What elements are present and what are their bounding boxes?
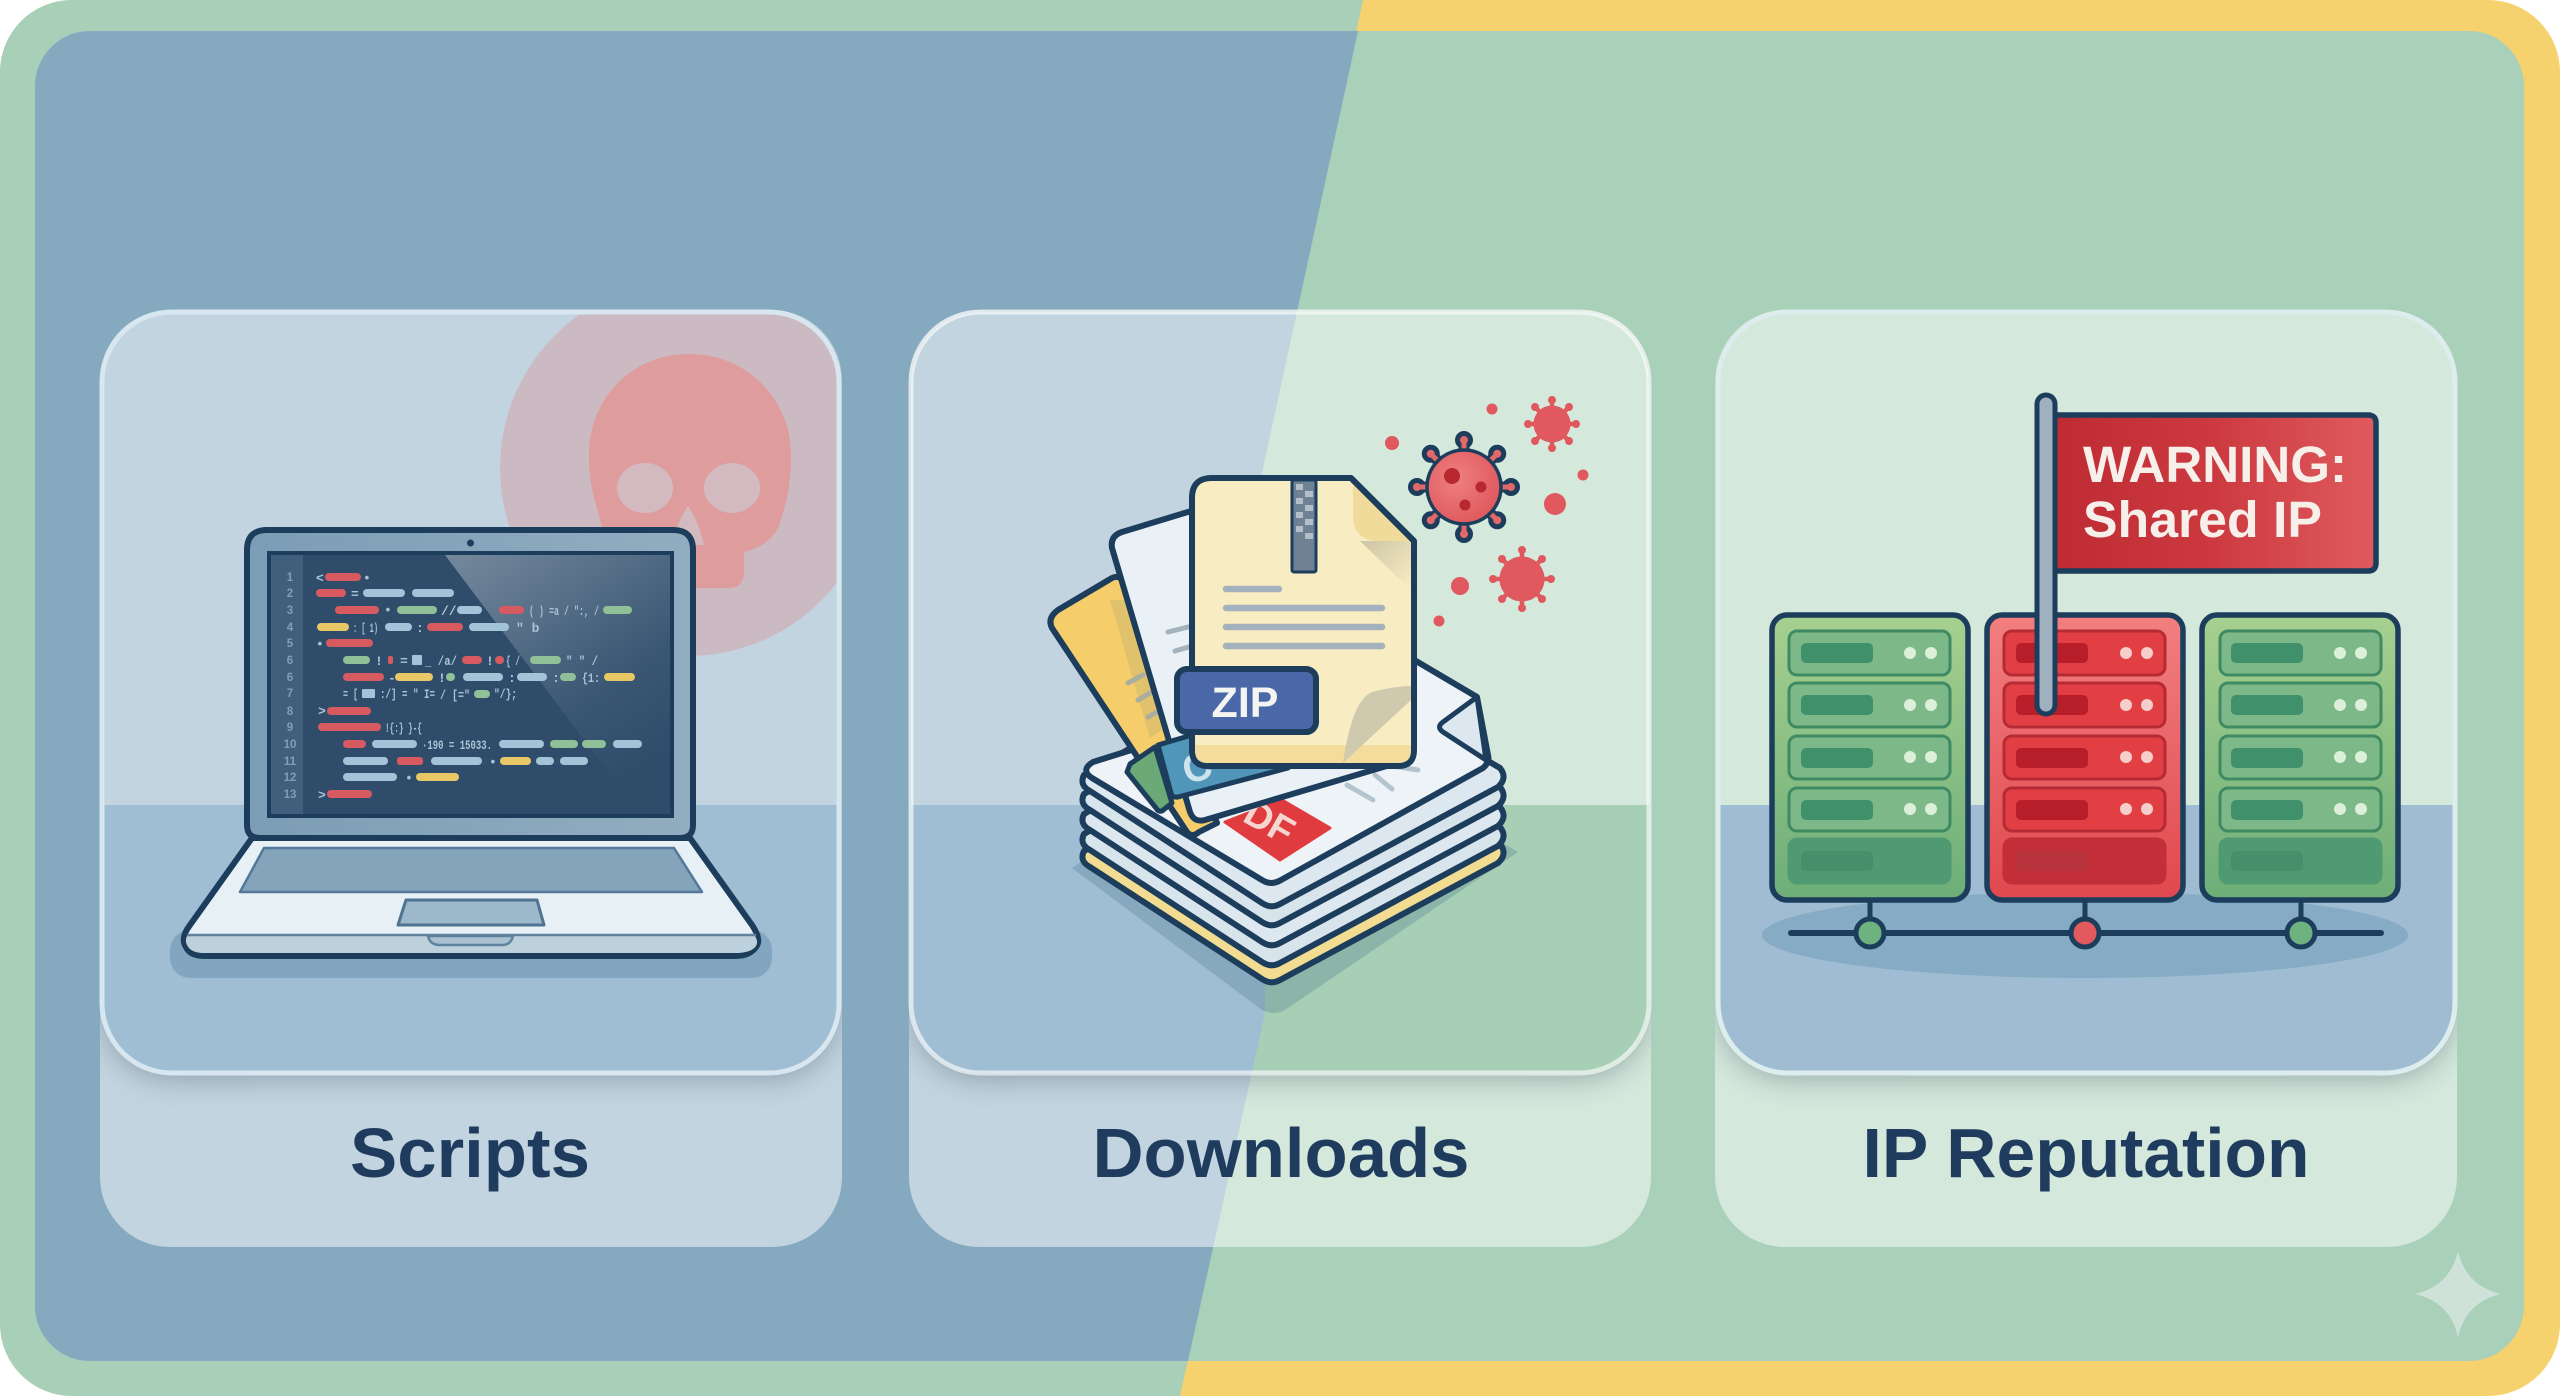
code punctuation: ( ) =a / ":, / [529, 604, 599, 619]
code punctuation: / [=" [440, 688, 470, 703]
zipper [1292, 480, 1316, 572]
top sheet [1086, 661, 1488, 883]
yellow document [1050, 577, 1217, 835]
server rack: center red [1987, 615, 2183, 900]
code punctuation: " b [516, 621, 540, 636]
code punctuation [316, 571, 600, 803]
heading: downloads: Downloads [1092, 1114, 1470, 1192]
ZIP document [1192, 478, 1414, 766]
code red tokens [316, 573, 524, 798]
flag pole [2037, 395, 2055, 714]
panel outline [911, 312, 1649, 1073]
card body [909, 310, 1651, 1247]
line numbers: 8 [287, 706, 294, 718]
code punctuation: ·190 = 15033. [422, 738, 492, 753]
main virus [1410, 434, 1518, 540]
ZIP label [1177, 669, 1316, 732]
keyboard [240, 848, 702, 892]
code punctuation: : [508, 671, 516, 686]
blue card: C [1178, 743, 1217, 793]
label shadow [911, 318, 1649, 1079]
code punctuation: = [ [343, 687, 358, 702]
code punctuation: < [316, 571, 324, 586]
code punctuation: ! [486, 654, 494, 669]
PDF tag: DF [1237, 792, 1301, 854]
code punctuation: • [405, 771, 413, 786]
panel outline [1718, 312, 2455, 1073]
line numbers: 12 [284, 772, 296, 784]
network line [1791, 898, 2381, 947]
code punctuation: > [318, 788, 326, 803]
server rack: right green [2202, 615, 2398, 900]
line numbers: 2 [287, 588, 293, 600]
code punctuation: : [416, 621, 424, 636]
line numbers: 5 [287, 638, 294, 650]
floor [100, 805, 841, 1073]
code punctuation: • [316, 637, 324, 652]
laptop lid [247, 530, 693, 838]
code punctuation: { / [506, 654, 520, 669]
code punctuation: !{:} }-{ [385, 721, 422, 736]
document text lines [1226, 589, 1382, 646]
code punctuation: "/}; [494, 687, 517, 702]
icon: document stack [1050, 478, 1518, 1013]
webcam [467, 540, 474, 546]
code punctuation: - [388, 671, 396, 686]
code punctuation: = [351, 587, 359, 602]
line numbers [284, 572, 297, 801]
code punctuation: • [384, 603, 392, 618]
icon: laptop [170, 530, 772, 978]
flag banner [2054, 415, 2376, 571]
code yellow tokens [317, 623, 635, 781]
paper layers [1082, 650, 1504, 982]
code punctuation: : [ 1) [353, 621, 378, 636]
code screen [269, 553, 672, 816]
line numbers: 13 [284, 789, 296, 801]
small virus bottom [1490, 546, 1554, 612]
scene: scripts [104, 314, 836, 1070]
laptop base [184, 838, 758, 956]
label shadow [1718, 318, 2455, 1079]
floor [910, 805, 1650, 1073]
panel: scripts [100, 280, 876, 1247]
code punctuation: // [441, 604, 457, 619]
code punctuation: ! [375, 654, 383, 669]
green card [1127, 747, 1172, 811]
panel outline [102, 312, 839, 1073]
line numbers: 1 [287, 572, 294, 584]
card body [1715, 310, 2457, 1247]
PDF tag [1225, 792, 1330, 860]
code punctuation: _ /a/ [424, 654, 457, 669]
code punctuation: " " / [566, 654, 598, 669]
card body [100, 310, 842, 1247]
line numbers: 6 [287, 655, 293, 667]
line numbers: 4 [287, 622, 294, 634]
stack shadow [1072, 722, 1518, 1013]
trackpad [398, 900, 544, 925]
code punctuation: ! [438, 671, 446, 686]
code punctuation: :/] = " I= [380, 687, 435, 702]
code punctuation: > [318, 704, 326, 719]
line numbers: 7 [287, 688, 293, 700]
warning flag [2037, 395, 2376, 714]
code blue tokens [343, 589, 642, 781]
code punctuation: • [363, 571, 371, 586]
heading: scripts: Scripts [350, 1114, 590, 1192]
icon: virus cluster [1385, 396, 1588, 626]
code punctuation: • [489, 755, 497, 770]
icon: sparkle [2415, 1251, 2501, 1337]
flag text: WARNING: [2083, 436, 2347, 493]
label shadow [102, 318, 839, 1079]
floor [1717, 805, 2457, 1073]
line numbers: 3 [287, 605, 293, 617]
server rack: left green [1772, 615, 1968, 900]
flag text: Shared IP [2083, 491, 2322, 548]
line numbers: 9 [287, 722, 293, 734]
flag text [2083, 436, 2347, 548]
heading: IP reputation: IP Reputation [1862, 1114, 2310, 1192]
code punctuation: {1: [582, 671, 600, 686]
code green tokens [343, 606, 632, 748]
floating particles [1385, 404, 1588, 626]
line numbers: 6 [287, 672, 293, 684]
small virus top [1524, 396, 1580, 452]
line numbers: 10 [284, 739, 296, 751]
laptop shadow [170, 930, 772, 978]
white document [1112, 478, 1400, 821]
panel: downloads [909, 310, 1651, 1247]
code punctuation: = [400, 654, 408, 669]
ZIP label: ZIP [1212, 679, 1278, 727]
skull watermark [500, 314, 836, 656]
panel: IP reputation [1715, 310, 2457, 1247]
blue card [1158, 735, 1288, 797]
network shadow [1762, 892, 2408, 978]
line numbers: 11 [284, 756, 297, 768]
code punctuation: : [552, 671, 560, 686]
